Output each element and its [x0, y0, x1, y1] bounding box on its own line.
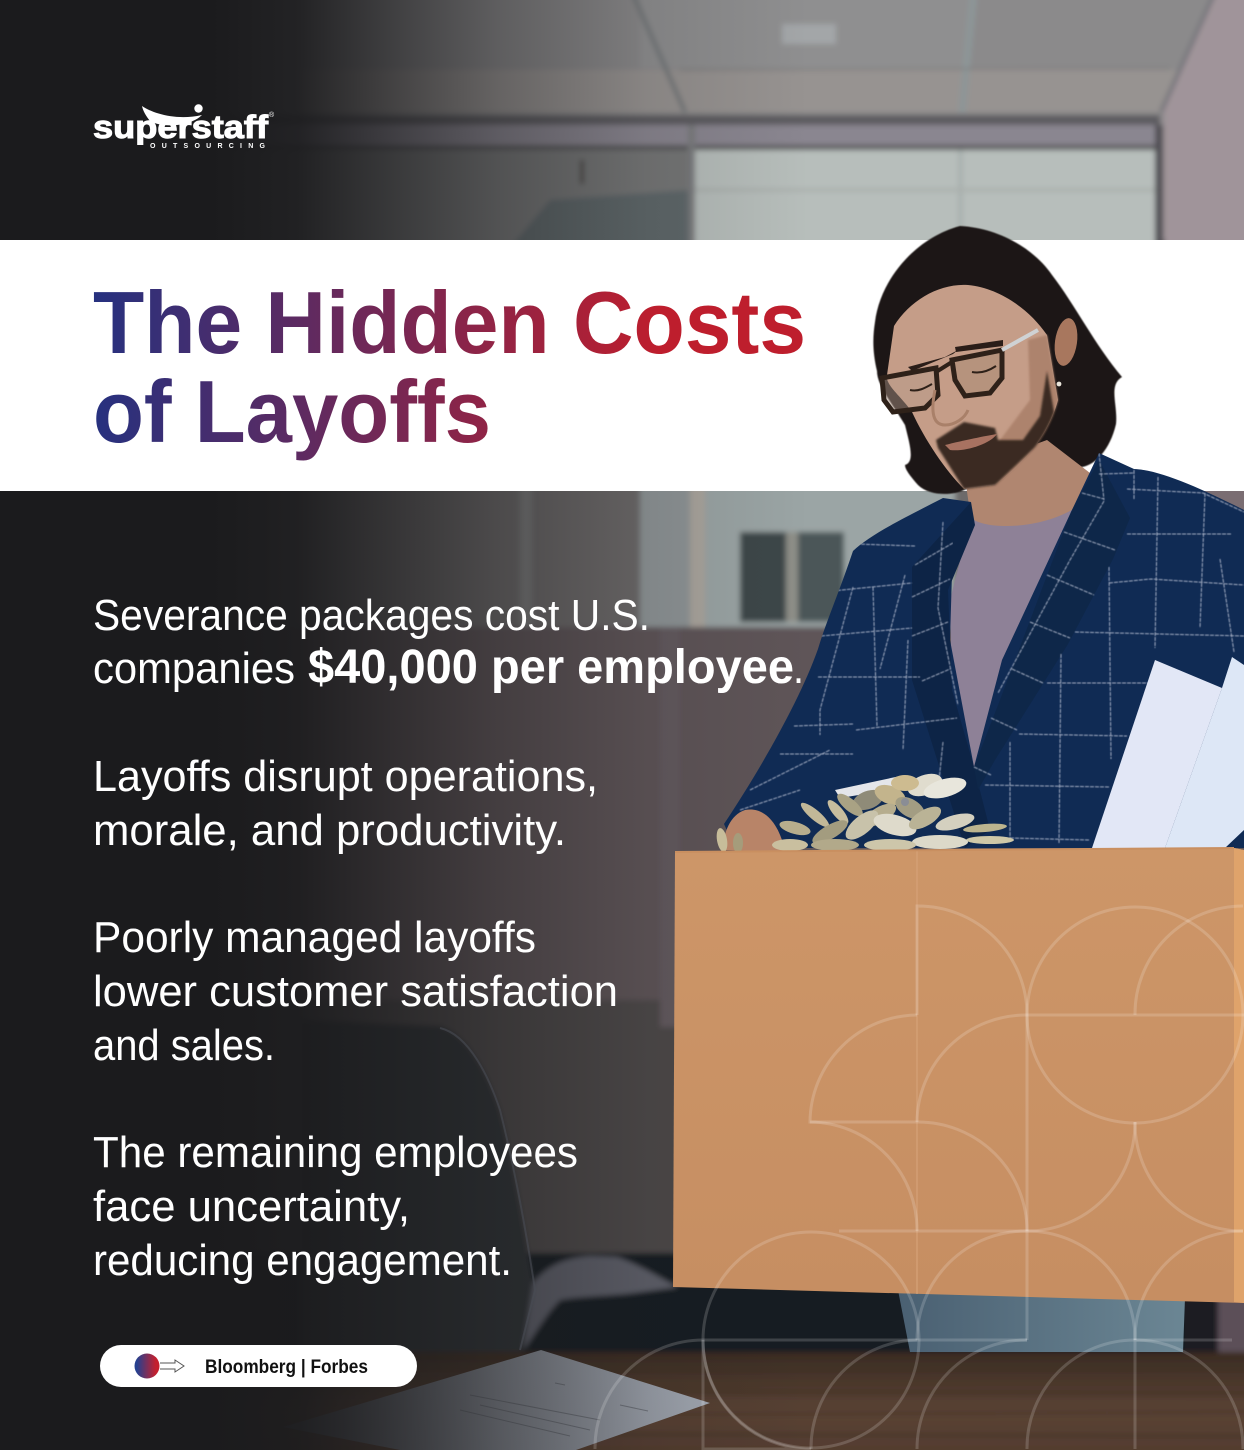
desk wood grain: [600, 1370, 1244, 1436]
chair back: [300, 1020, 535, 1360]
right lens: [952, 350, 1002, 396]
neck: [964, 440, 1090, 536]
title: [93, 273, 806, 461]
trousers: [898, 1290, 1185, 1352]
glass partition: [0, 150, 695, 250]
cardboard box: [673, 848, 1244, 1303]
disruption line 1: Layoffs disrupt operations,: [93, 752, 598, 801]
chair edge highlight: [440, 1028, 535, 1350]
customer line 3: and sales.: [93, 1021, 275, 1070]
title line 1: The Hidden Costs: [93, 273, 806, 372]
paper sheet: [283, 1350, 710, 1450]
glasses: [882, 330, 1038, 412]
ceiling: [0, 0, 1244, 240]
earring: [1057, 382, 1061, 386]
chair arm: [523, 1256, 678, 1350]
lower dark band: [0, 1253, 1244, 1363]
left lapel: [912, 502, 990, 848]
face: [887, 285, 1058, 489]
remaining line 2: face uncertainty,: [93, 1182, 410, 1231]
paper text lines: [460, 1383, 648, 1436]
lips: [945, 434, 997, 450]
white title band: [0, 240, 1244, 491]
rolled paper front: [1092, 660, 1222, 848]
window band: [0, 480, 1244, 627]
hair back: [873, 226, 1122, 494]
pill background: [100, 1345, 417, 1387]
geometric line pattern: [595, 906, 1244, 1449]
blazer: [724, 453, 1244, 848]
title line 2: of Layoffs: [93, 362, 491, 461]
box front: [673, 848, 1244, 1303]
beard: [936, 371, 1054, 489]
text block: customer satisfaction: [93, 913, 618, 1070]
wall: [0, 627, 1244, 1253]
severance period: .: [793, 644, 804, 693]
logo registered mark: ®: [269, 111, 275, 119]
blazer body: [724, 453, 1244, 848]
box right edge: [1234, 848, 1244, 1303]
right lapel: [974, 460, 1130, 790]
hand: [722, 809, 785, 852]
logo: superstaff outsourcing: [93, 104, 275, 150]
severance highlight: $40,000 per employee: [308, 641, 794, 694]
source pill: [100, 1345, 417, 1387]
remaining line 1: The remaining employees: [93, 1128, 578, 1177]
customer line 2: lower customer satisfaction: [93, 967, 618, 1016]
text block: remaining employees: [93, 1128, 578, 1285]
logo head dot: [194, 104, 203, 113]
text block: severance: [93, 591, 804, 694]
rolled paper back: [1165, 657, 1244, 848]
ceiling beam: [0, 115, 1160, 125]
man holding box: [673, 226, 1244, 1303]
ear: [1052, 317, 1080, 367]
temple arm: [1002, 330, 1038, 350]
face shade: [995, 335, 1058, 485]
wall right of legs: [1218, 1296, 1244, 1356]
customer line 1: Poorly managed layoffs: [93, 913, 536, 962]
text block: disruption: [93, 752, 598, 855]
eyebrows: [908, 340, 1003, 371]
nose: [933, 390, 968, 425]
plant leaves: [715, 769, 1014, 853]
source text: Bloomberg | Forbes: [205, 1357, 368, 1378]
box top edge: [675, 848, 1234, 852]
logo wordmark: superstaff: [93, 109, 268, 145]
remaining line 3: reducing engagement.: [93, 1236, 512, 1285]
disruption line 2: morale, and productivity.: [93, 806, 566, 855]
desk: [0, 1352, 1244, 1450]
box fold line: [916, 850, 918, 1294]
t-shirt: [950, 508, 1075, 767]
bridge: [936, 362, 952, 372]
left lens: [882, 368, 938, 412]
blazer check lines: [740, 453, 1244, 844]
severance line 2 lead: companies: [93, 644, 295, 693]
closed eyes: [910, 366, 996, 391]
logo swoosh: [142, 106, 202, 125]
source icon: gradient dot: [134, 1354, 160, 1378]
source icon: arrow: [160, 1360, 184, 1372]
logo subline: OUTSOURCING: [150, 143, 266, 150]
desk paper: [283, 1350, 710, 1450]
severance line 1: Severance packages cost U.S.: [93, 591, 650, 640]
